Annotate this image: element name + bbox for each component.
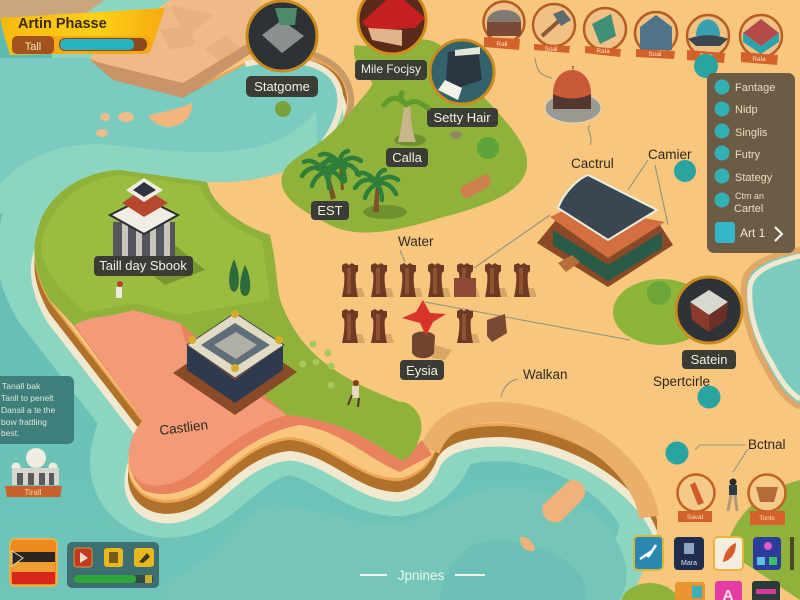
menu item: Nidp: Nidp [735, 104, 758, 116]
shrubs and log on north island [450, 131, 499, 198]
menu button [715, 222, 782, 243]
palm tree on north island [384, 93, 428, 146]
app icon: navy card: Mara [681, 560, 697, 567]
cove rim [252, 49, 351, 122]
label: Calla: Calla [392, 150, 423, 165]
south-east grass [725, 480, 800, 600]
palm group [302, 151, 407, 219]
north island [281, 39, 527, 233]
icon: teal building [740, 15, 782, 65]
label: EST: EST [317, 203, 343, 218]
header banner [0, 8, 165, 55]
app icon: purple tiles [753, 537, 781, 570]
menu item: Nidp [714, 102, 758, 116]
progress bar: Tall [25, 41, 41, 53]
icon: columned hall: Soal [648, 51, 662, 58]
green inner highlight [41, 175, 270, 315]
icon: hammer: Soal [544, 46, 558, 53]
label: Satein [682, 350, 736, 369]
icon: dome hall: Rall [496, 41, 508, 48]
salmon shore band [75, 310, 432, 494]
caption [360, 568, 485, 583]
soldier figure [116, 281, 123, 298]
tower row bottom [342, 309, 507, 343]
label: Taill day Sbook [94, 256, 193, 276]
top-left shore [0, 0, 170, 57]
control panel [67, 542, 159, 588]
tan shoulder above the bay [430, 412, 649, 517]
walker figure [348, 380, 359, 407]
label: Satein: Satein [691, 352, 727, 367]
annotation: Walkan: Walkan [523, 367, 568, 382]
main green land [34, 170, 422, 460]
fort plateau [90, 0, 262, 98]
teal markers [666, 54, 720, 464]
label: EST [311, 201, 349, 220]
annotation: Water: Water [398, 234, 434, 249]
icon: columned hall [635, 12, 677, 59]
side bar [790, 537, 794, 570]
menu item: Futry [714, 146, 761, 161]
menu item: Carfel: Cartel [734, 203, 763, 215]
icon: domed palace [5, 448, 62, 497]
annotation: Bctnal: Bctnal [748, 437, 786, 452]
icon: green tower: Rala [596, 48, 610, 55]
menu item: Carfel: Ctm an [735, 191, 764, 201]
icon: blue dome: Rala [699, 53, 713, 60]
header title: Artin Phasse [18, 16, 107, 32]
medallion: Setty Hair [427, 40, 498, 127]
label: Taill day Sbook: Taill day Sbook [99, 258, 187, 273]
bay deepest water [440, 539, 586, 600]
medallion: Mile Focjsy [355, 0, 427, 80]
medallion: Setty Hair: Setty Hair [433, 110, 491, 125]
note panel: bow frattling [1, 417, 47, 427]
bay mid water [160, 487, 627, 600]
salmon plain [75, 310, 287, 486]
icon: hammer [533, 4, 575, 53]
east island [613, 279, 709, 345]
icon: teal building: Rala [752, 56, 766, 63]
tower row top [342, 263, 537, 297]
icon: green tower [584, 8, 626, 57]
label: Calla [386, 148, 428, 167]
connector lines [400, 58, 748, 472]
app icon: chart [634, 536, 663, 570]
icon: bottle medallion: Saval [687, 514, 704, 521]
app icon: orange tile [675, 582, 705, 600]
cove shallows [0, 110, 318, 215]
east island shrub [647, 281, 671, 305]
green dots [300, 340, 334, 388]
menu item: Futry: Futry [735, 149, 761, 161]
label: Eysia: Eysia [406, 363, 439, 378]
icon: blue dome [687, 15, 729, 63]
cove beach [245, 60, 340, 150]
progress bar [12, 36, 151, 54]
south grass patch [620, 583, 680, 600]
app icon grid [634, 536, 794, 600]
medallion: Statgome [246, 1, 318, 97]
east water rim [744, 250, 800, 407]
note panel: Tanll to penelt [1, 393, 54, 403]
menu item: Fantage [714, 80, 775, 94]
market hall building [537, 175, 673, 287]
castle building [173, 310, 297, 415]
icon: basket medallion: Tonts [759, 515, 776, 522]
annotation: Castlien: Castlien [159, 417, 209, 438]
temple building [110, 178, 205, 285]
east water beach [750, 256, 800, 399]
annotation: Camier: Camier [648, 147, 692, 162]
menu item: Carfel [714, 191, 764, 215]
menu item: Stategy [714, 168, 773, 184]
icon: bottle medallion [678, 474, 714, 522]
cove water [0, 58, 339, 185]
icon: dome hall [484, 2, 524, 50]
medallion: Mile Focjsy: Mile Focjsy [361, 62, 421, 76]
menu button: Art 1 [740, 226, 766, 240]
islets [96, 101, 291, 137]
panel: right menu [707, 73, 795, 253]
menu item: Fantage: Fantage [735, 82, 775, 94]
app icon: dark tile [752, 581, 780, 600]
east medallion building [676, 277, 742, 343]
bay rocks [520, 480, 585, 551]
medallion: Statgome: Statgome [254, 79, 310, 94]
app icon: pink A [715, 581, 742, 600]
icon: basket medallion [748, 474, 786, 525]
dome building [545, 66, 601, 123]
top icon row [484, 2, 782, 65]
red umbrella [402, 300, 452, 360]
app icon: surfboard [714, 537, 743, 570]
note panel: Tanall bak [2, 381, 41, 391]
annotation: Cactrul: Cactrul [571, 156, 614, 171]
explorer figure [728, 478, 737, 511]
note panel: best. [1, 428, 19, 438]
note panel: Dansil a te the [1, 405, 56, 415]
menu item: Singlis [714, 124, 768, 139]
label: Eysia [400, 360, 444, 380]
app icon: navy card [674, 537, 704, 570]
east water [744, 250, 800, 407]
icon: domed palace: Tirall [24, 488, 42, 497]
icon: flag badge [10, 539, 57, 586]
menu item: Stategy: Stategy [735, 172, 773, 184]
cypress trees [229, 259, 250, 296]
caption: Jpnines [398, 568, 445, 583]
note panel [0, 376, 74, 444]
annotation: Spertcirle: Spertcirle [653, 374, 710, 389]
menu item: Singlis: Singlis [735, 127, 768, 139]
